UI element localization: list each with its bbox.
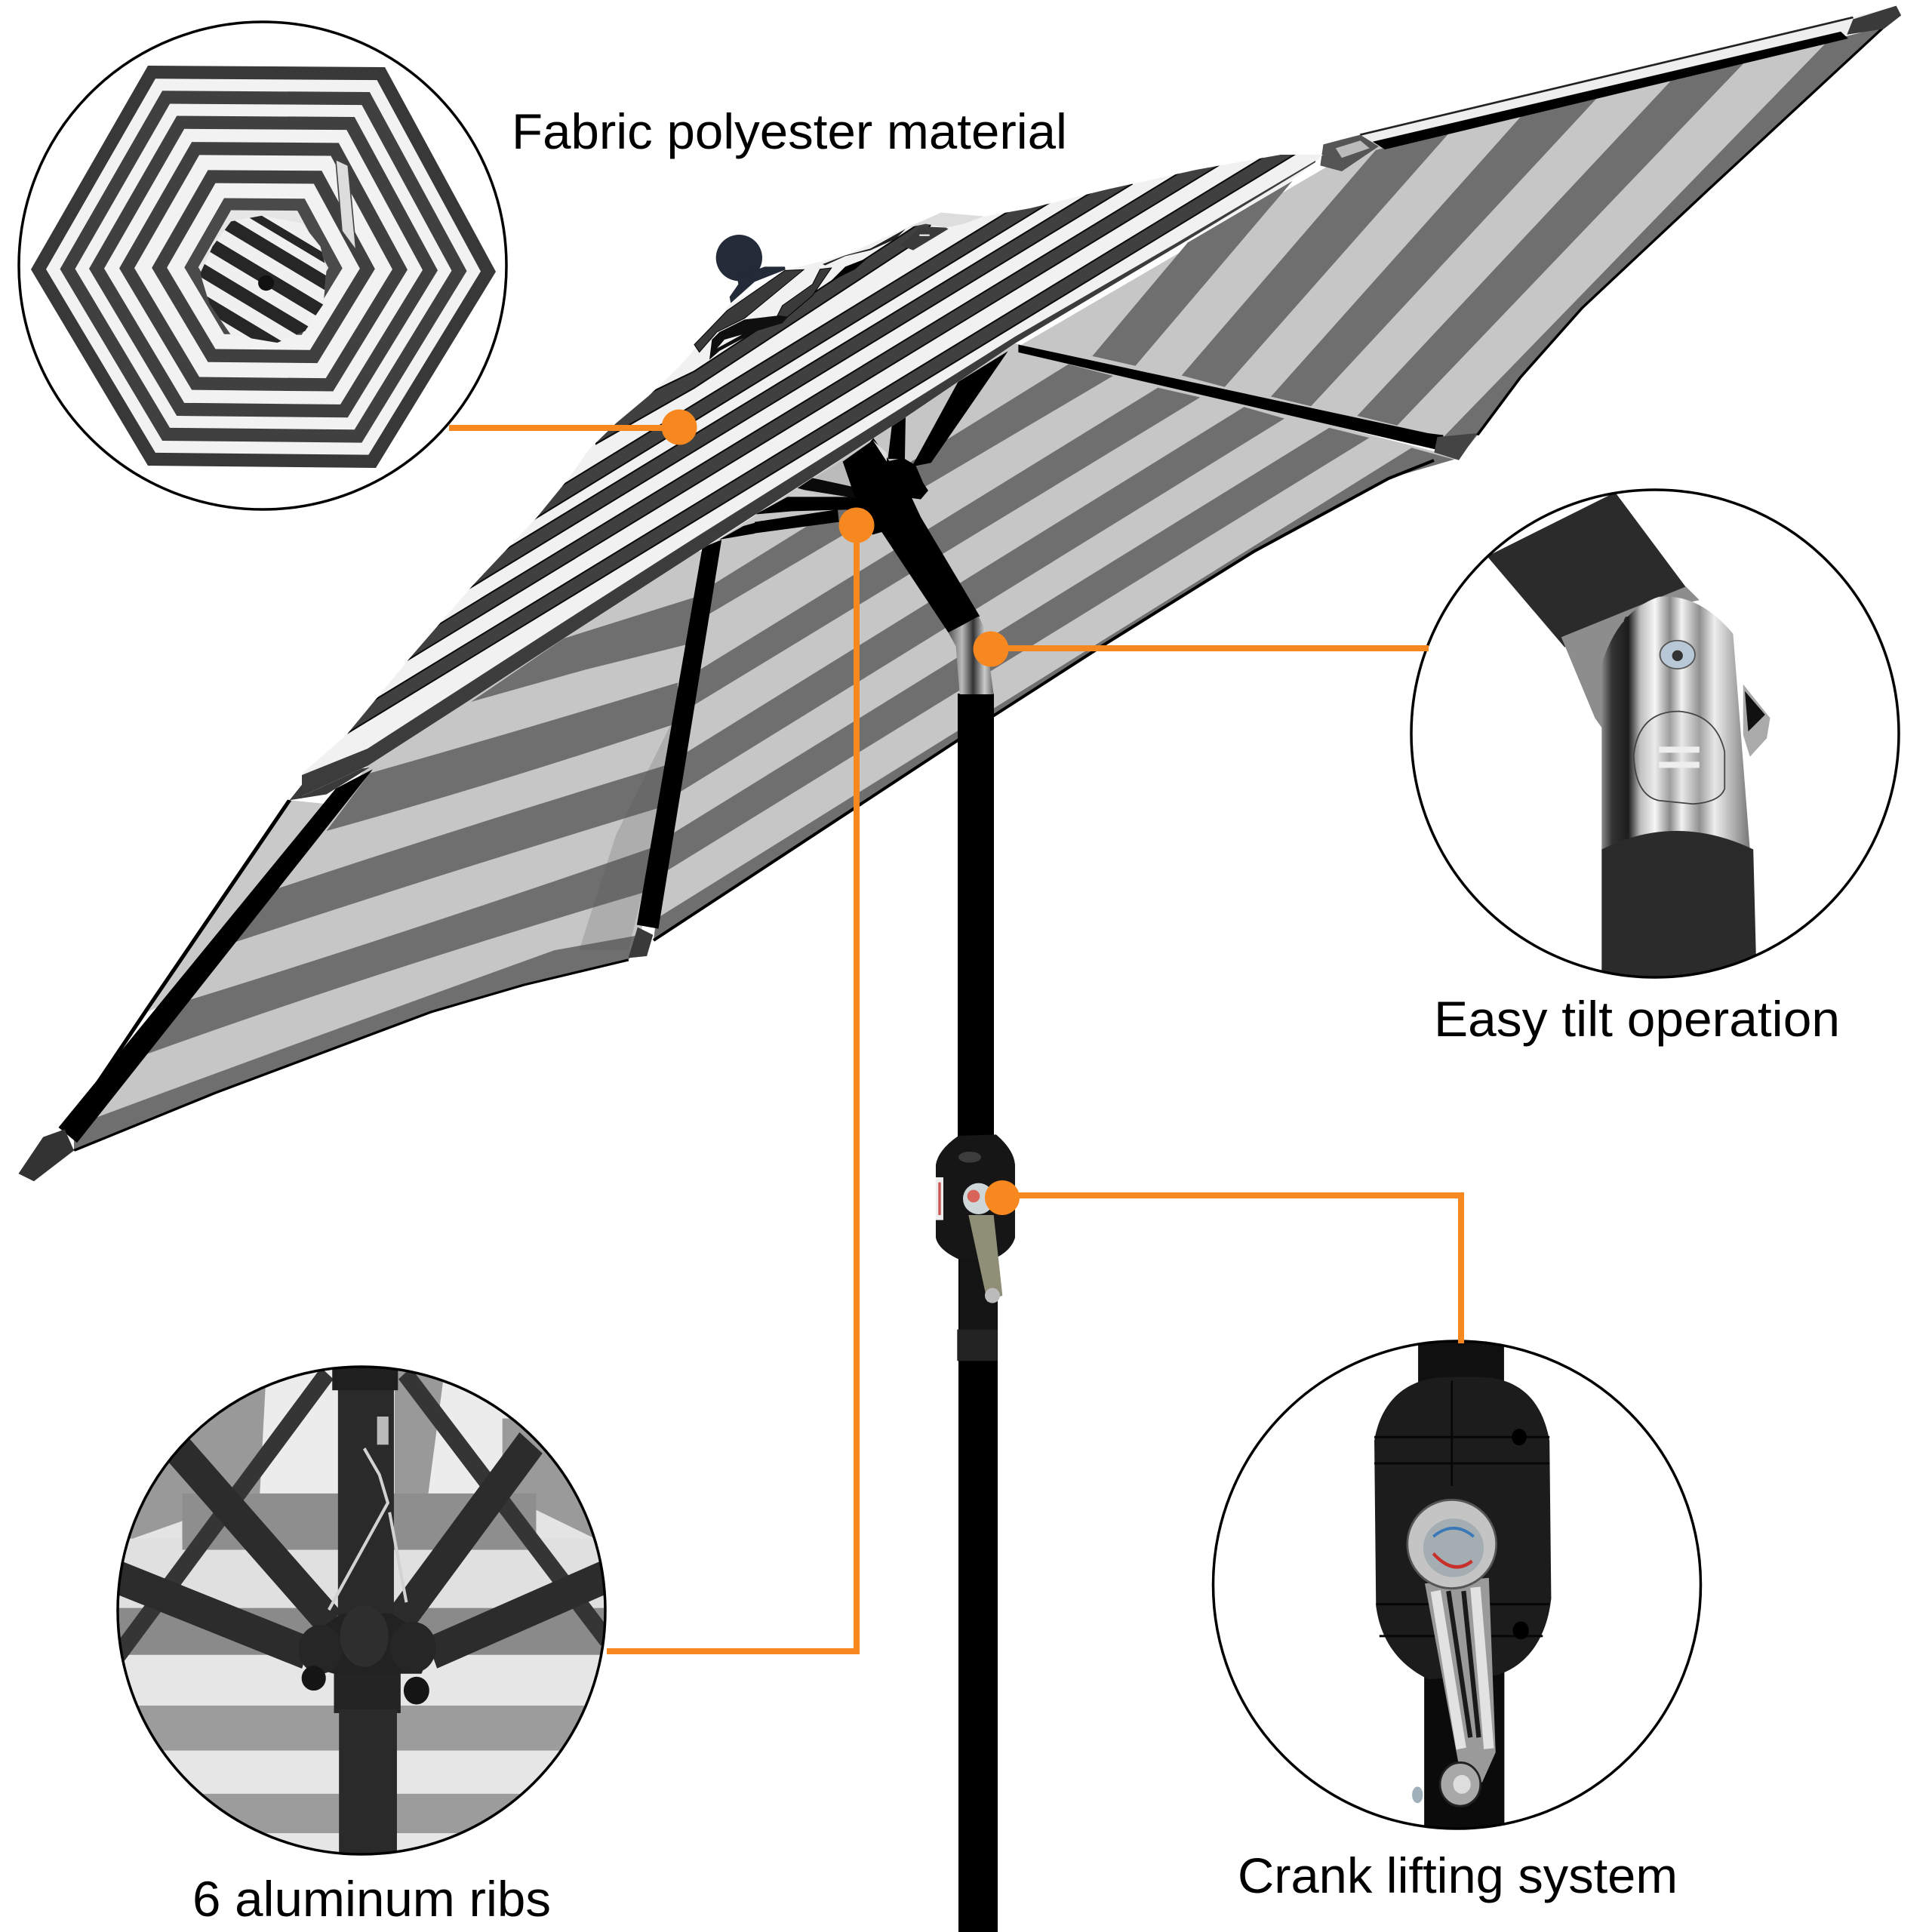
inset circle: fabric polyester top view xyxy=(19,22,506,509)
rib: middle lower xyxy=(637,540,721,929)
rib: lower right xyxy=(1018,6,1901,460)
mini crank housing on pole xyxy=(936,1134,1015,1361)
screw xyxy=(1660,641,1695,669)
inset circle: easy tilt joint xyxy=(1411,490,1899,981)
release lever xyxy=(1743,685,1770,757)
rib tip: right xyxy=(1434,433,1478,460)
concentric hexagon stripes xyxy=(31,66,496,468)
elbow joint: upper rib xyxy=(1320,135,1379,171)
umbrella vent xyxy=(200,160,355,343)
embossed emblem xyxy=(1634,711,1724,804)
heading: Fabric polyester material: Fabric polyester material xyxy=(512,103,1067,159)
callout: fabric connector xyxy=(449,409,697,445)
panel: canopy top striped fabric xyxy=(302,155,1323,796)
crank dial xyxy=(1407,1500,1497,1589)
background fabric stripes xyxy=(112,1366,611,1494)
rib: left with silver strip xyxy=(18,768,653,1181)
panel: canopy underside right xyxy=(1018,27,1884,458)
crank handle xyxy=(1425,1578,1496,1783)
inset circle: crank lifting system xyxy=(1214,1340,1701,1832)
rib tip: lower centre xyxy=(629,928,653,958)
callout: crank connector xyxy=(985,1180,1464,1343)
hub and upper tilted pole xyxy=(719,351,1008,694)
main ribs xyxy=(115,1443,607,1653)
pole sections xyxy=(1418,1342,1504,1383)
ridged ring xyxy=(1561,586,1700,735)
central pole xyxy=(338,1390,394,1616)
label: 6 aluminum ribs: 6 aluminum ribs xyxy=(192,1871,551,1927)
canopy top vent and strap xyxy=(694,213,983,360)
crank knob xyxy=(1440,1762,1481,1806)
chrome joint body xyxy=(1601,596,1750,850)
callout: tilt connector xyxy=(974,631,1429,667)
canopy hem xyxy=(302,161,1315,796)
crank housing xyxy=(1374,1377,1551,1679)
canopy underside left edge xyxy=(74,960,629,1150)
lower tube xyxy=(1601,831,1757,981)
inset circle: six aluminum ribs xyxy=(112,1366,611,1860)
canopy top finial knob xyxy=(716,235,786,303)
rib: upper right with white strip xyxy=(1360,6,1897,149)
cord xyxy=(329,1448,406,1610)
label: Crank lifting system: Crank lifting system xyxy=(1238,1847,1678,1903)
secondary struts xyxy=(118,1374,607,1655)
umbrella pole xyxy=(958,694,998,1932)
upper tube xyxy=(1487,492,1689,648)
tilt joint xyxy=(949,617,994,694)
pulley clip xyxy=(377,1417,389,1444)
panel: canopy underside middle xyxy=(641,340,1472,958)
rib tip: top right xyxy=(1847,6,1901,35)
hub xyxy=(325,1614,423,1674)
canopy underside middle edge xyxy=(654,460,1434,940)
panel: canopy underside left xyxy=(60,543,717,1162)
callout: ribs connector xyxy=(607,507,874,1654)
rib tip: left xyxy=(18,1129,74,1181)
label: Easy tilt operation: Easy tilt operation xyxy=(1434,991,1840,1047)
